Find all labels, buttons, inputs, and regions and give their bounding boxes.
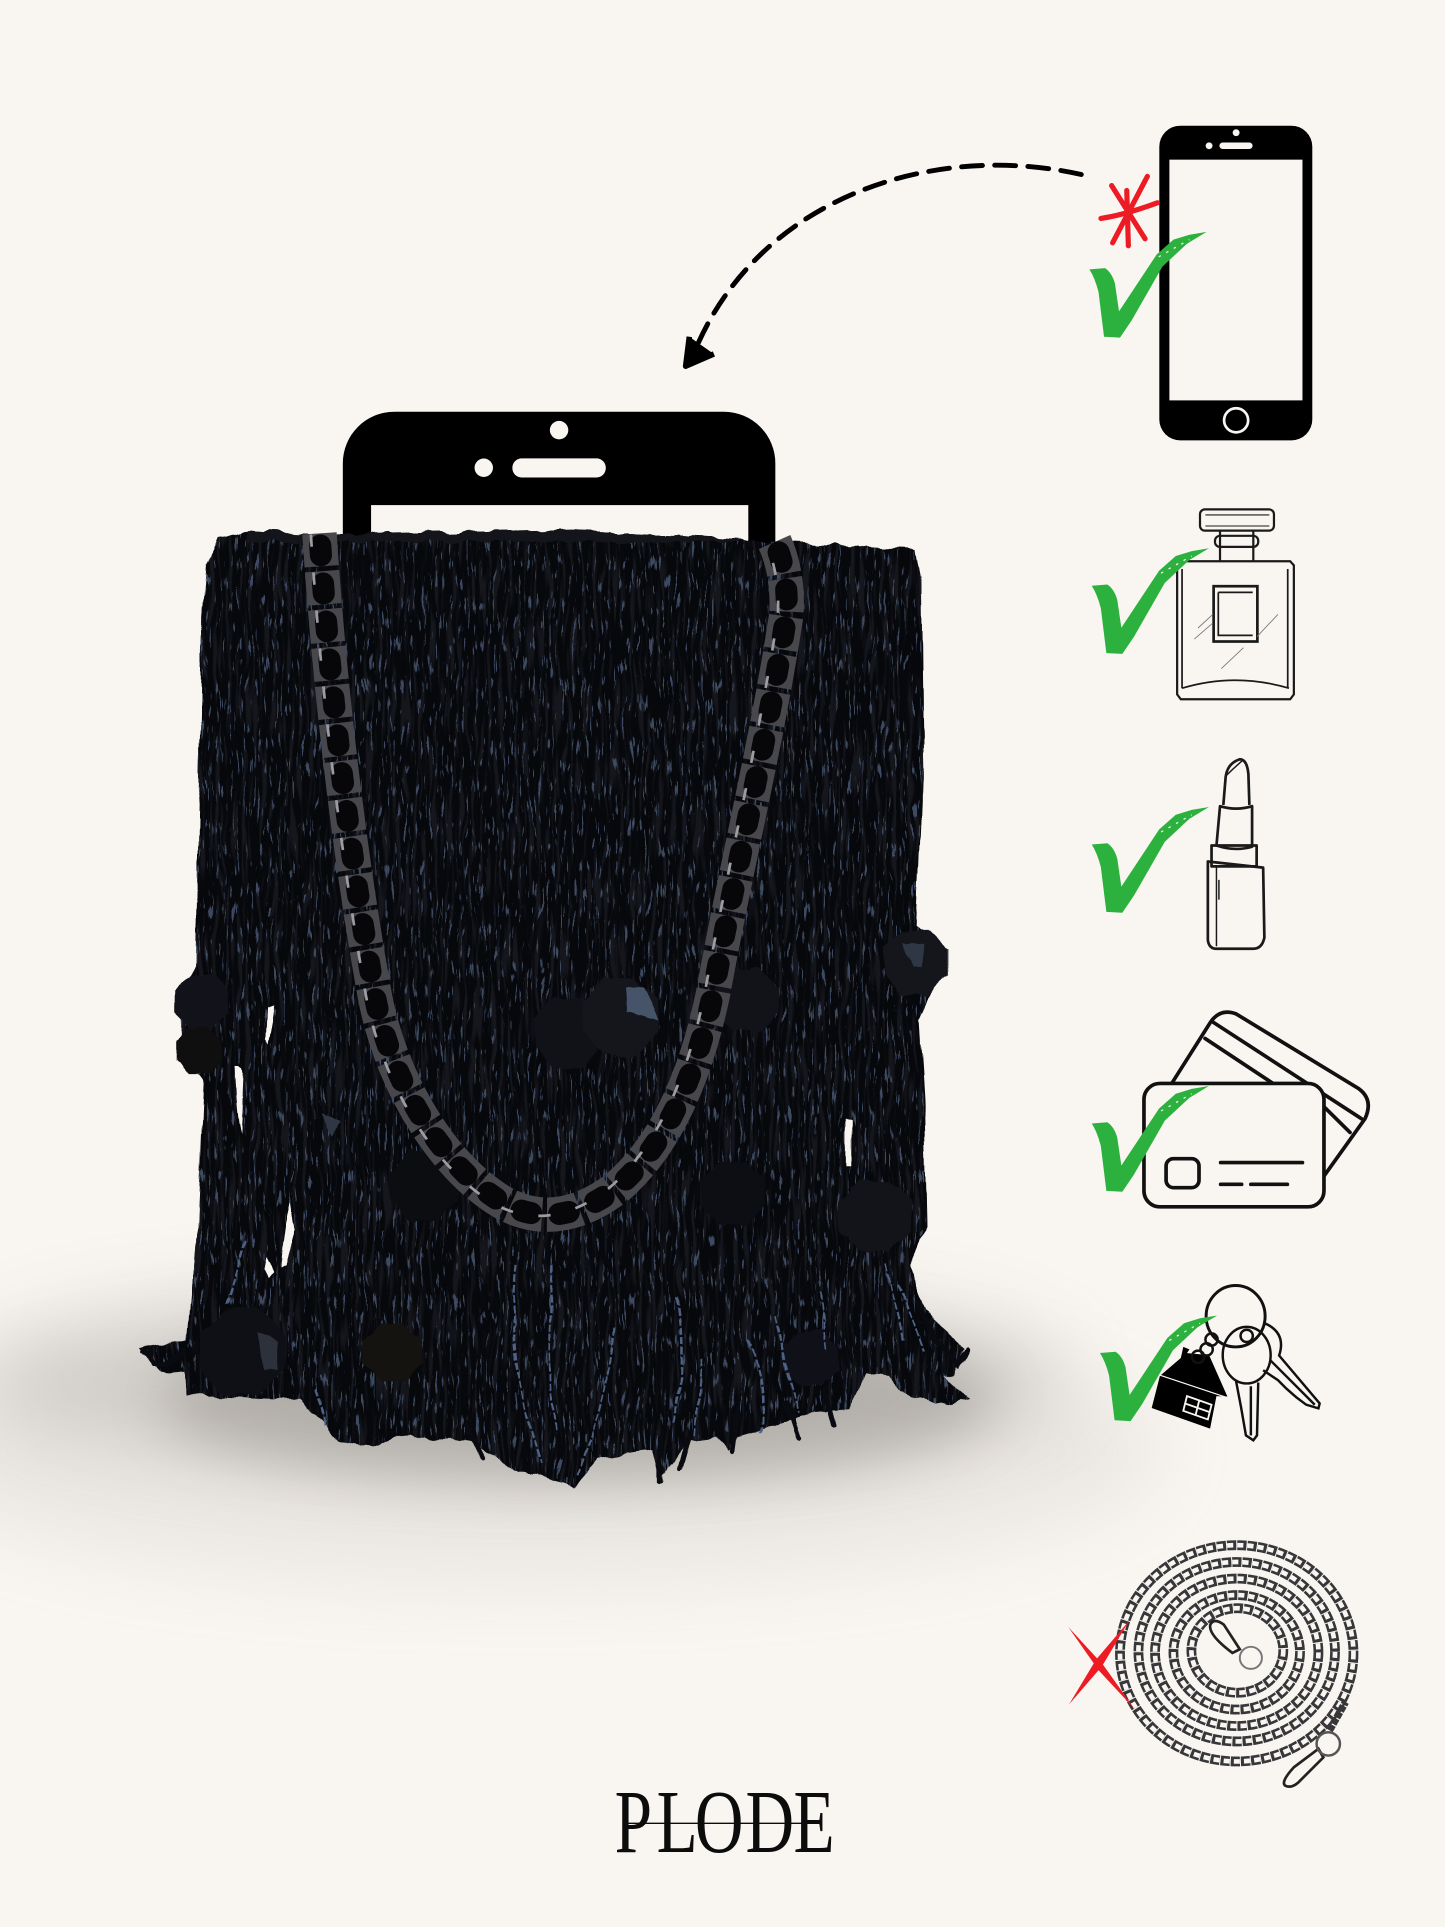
check mark: cards — [1092, 1086, 1209, 1192]
gaps between strands — [235, 1003, 850, 1278]
dashed arrow from phone to bag — [686, 165, 1081, 366]
red cross — [1068, 1621, 1135, 1709]
inner clasp — [1210, 1621, 1262, 1669]
icon: perfume bottle — [1177, 509, 1294, 699]
bright lower strands — [227, 1241, 924, 1475]
chain strap on bag — [311, 533, 787, 1216]
check mark: phone — [1089, 232, 1207, 338]
loose strand tips — [143, 1303, 968, 1482]
icon: red asterisk warning — [1101, 176, 1157, 246]
beaded fringe bag — [123, 516, 983, 1499]
check mark: lipstick — [1092, 807, 1209, 913]
brand logo: PLODE — [615, 1773, 835, 1872]
octagonal beads — [176, 930, 948, 1394]
icon: small phone — [1159, 126, 1312, 440]
icon: house keychain and keys — [1152, 1285, 1320, 1440]
icon: coiled chain strap — [1120, 1545, 1353, 1787]
icon: lipstick — [1208, 759, 1264, 949]
check mark: keys — [1100, 1315, 1217, 1421]
large phone emerging from bag — [343, 412, 775, 547]
check mark: perfume — [1092, 548, 1209, 654]
outer clasp — [1284, 1702, 1345, 1787]
bag floor shadow — [0, 1284, 1167, 1585]
icon: bank cards — [1144, 1012, 1368, 1207]
